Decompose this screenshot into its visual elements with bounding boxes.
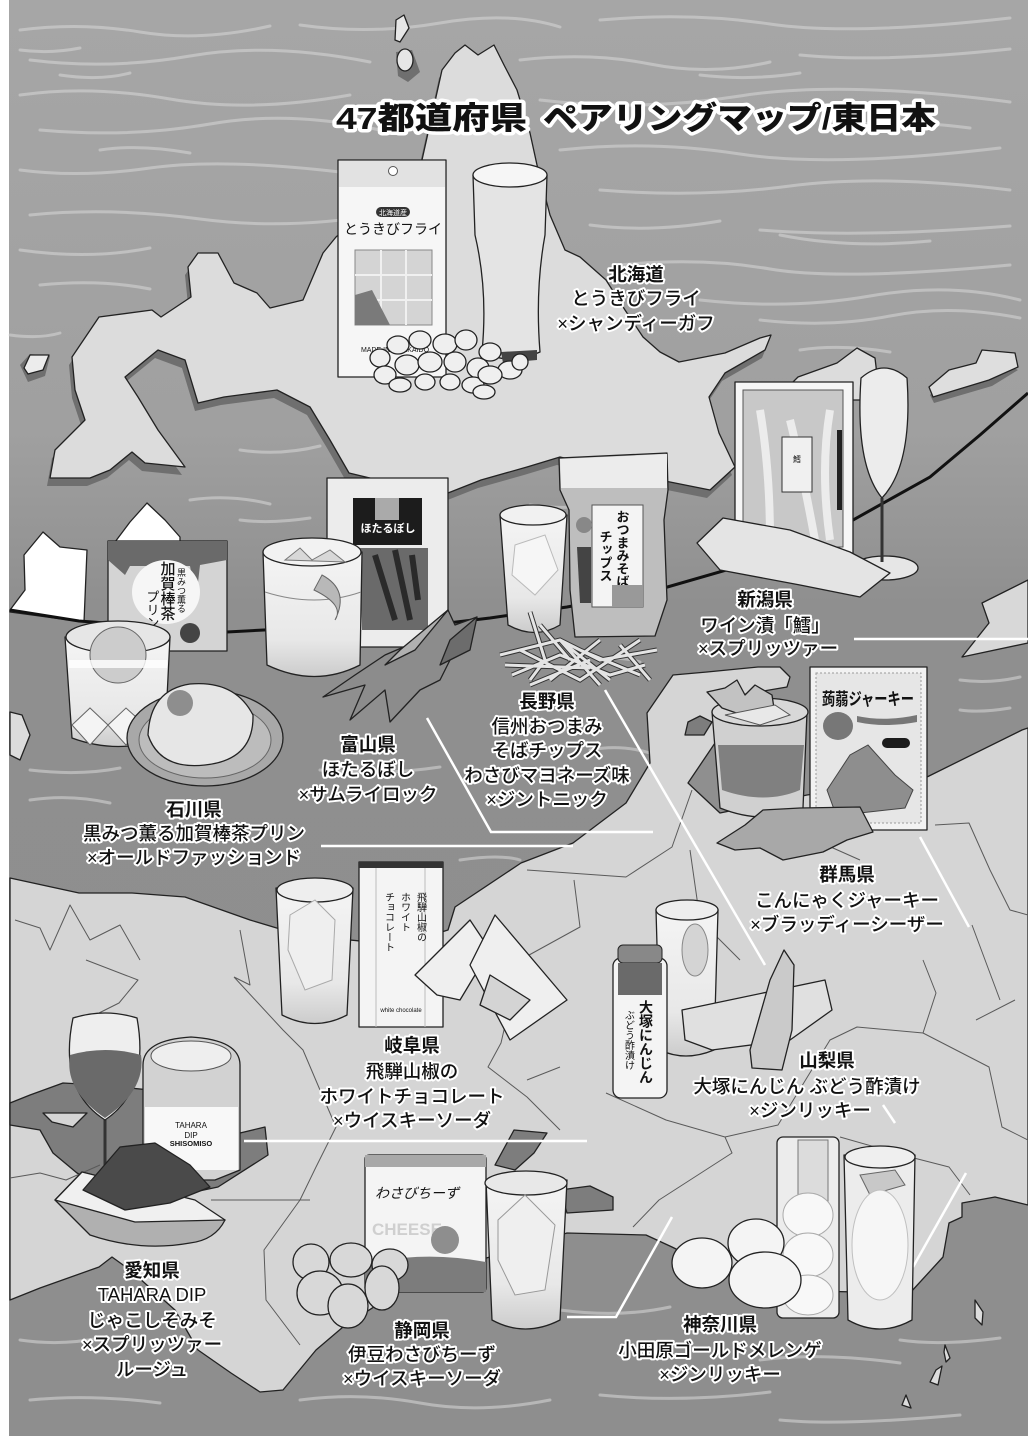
panel: 石川県 [65, 541, 305, 868]
label: 石川県: 黒みつ薫る加賀棒茶プリン [83, 823, 305, 844]
product box: 加賀棒茶プリン: 加賀棒茶 [158, 561, 176, 621]
label: 群馬県: ×ブラッディーシーザー [750, 914, 944, 935]
label: 愛知県: ×スプリッツァー [82, 1334, 222, 1355]
product bag: ほたるぼし [327, 478, 448, 647]
product package: ワイン漬 鱈 [735, 382, 853, 558]
panel: 北海道 [338, 160, 715, 399]
label: 神奈川県: 小田原ゴールドメレンゲ [618, 1340, 822, 1361]
gin rickey glass [844, 1146, 915, 1329]
soba chips pile [500, 612, 657, 685]
product bag: 伊豆わさびちーず [365, 1155, 486, 1292]
label: 神奈川県: ×ジンリッキー [659, 1364, 781, 1385]
carrots [682, 950, 832, 1070]
label: 愛知県: 愛知県 [124, 1260, 180, 1281]
title [336, 101, 936, 136]
label: 神奈川県: 神奈川県 [683, 1314, 757, 1335]
product box: ホワイトチョコレート: white chocolate [379, 1008, 422, 1014]
label: 岐阜県: ホワイトチョコレート [319, 1086, 505, 1107]
product jar: TAHARA DIP [143, 1037, 240, 1180]
product box: 加賀棒茶プリン [108, 541, 227, 651]
label: 新潟県: ワイン漬「鱈」 [700, 615, 830, 636]
pudding on plate [127, 684, 283, 786]
champagne glass: スプリッツァー [852, 368, 918, 580]
panel: 長野県 [464, 453, 668, 810]
panel: 静岡県 [293, 1155, 567, 1389]
product box: ホワイトチョコレート [359, 862, 443, 1027]
preserved cod fillet [697, 518, 890, 597]
label: 静岡県: ×ウイスキーソーダ [343, 1368, 501, 1389]
product bag: 伊豆わさびちーず: わさびちーず [375, 1185, 461, 1201]
label: 富山県: ×サムライロック [298, 784, 438, 805]
white chocolate pieces [415, 915, 567, 1040]
product jar: 大塚にんじん: ぶどう酢漬け [622, 1010, 634, 1070]
gin rickey glass [656, 900, 718, 1056]
label: 長野県: わさびマヨネーズ味 [464, 765, 630, 786]
product jar: TAHARA DIP: SHISOMISO [170, 1139, 212, 1148]
label: 岐阜県: 岐阜県 [384, 1035, 440, 1056]
bloody caesar glass [707, 680, 808, 817]
panel: 群馬県 [707, 667, 944, 935]
product package: こんにゃくジャーキー [810, 667, 927, 830]
label: 山梨県 [693, 1050, 921, 1121]
map: prefecture borders [10, 790, 1028, 1345]
panel: 富山県 [263, 478, 477, 805]
label: 長野県 [464, 691, 630, 810]
label: 北海道: とうきびフライ [571, 288, 701, 309]
corn snack pile [370, 330, 528, 399]
product bag: おつまみそばチップス [559, 453, 668, 637]
panel: 山梨県 [613, 900, 921, 1121]
product bag: ほたるぼし: ほたるぼし [360, 522, 416, 535]
product box: ホワイトチョコレート: ホワイト [398, 892, 410, 932]
product bag: とうきびフライ: MADE IN HOKKAIDO [361, 347, 430, 354]
leader lines [244, 639, 1028, 1317]
title: 47都道府県 [336, 101, 527, 136]
label: 愛知県: TAHARA DIP [98, 1284, 206, 1305]
konjac jerky [717, 807, 873, 860]
lemons [672, 1219, 801, 1308]
map: white land top left [10, 503, 180, 760]
label: 愛知県: ルージュ [116, 1359, 188, 1380]
map: inland bays [10, 716, 712, 1213]
rose wine glass [69, 1013, 142, 1165]
label: 山梨県: 山梨県 [799, 1050, 855, 1071]
label: 富山県 [298, 734, 438, 805]
label: 石川県 [83, 799, 305, 868]
product box: 加賀棒茶プリン: プリン [144, 590, 160, 629]
whisky soda glass [276, 878, 353, 1024]
product box: ホワイトチョコレート: 飛騨山椒の [414, 892, 426, 942]
label: 石川県: ×オールドファッションド [87, 847, 301, 868]
beer glass: シャンディーガフ [473, 163, 547, 363]
product bag: おつまみそばチップス: チップス [598, 530, 612, 582]
product jar: ゴールドメレンゲ [777, 1137, 839, 1318]
label: 神奈川県 [618, 1314, 822, 1385]
wasabi cheese balls [293, 1243, 408, 1328]
map: eastern island [962, 580, 1028, 657]
dip on shell [55, 1143, 225, 1246]
whisky soda glass [485, 1171, 567, 1329]
product package: こんにゃくジャーキー: 蒟蒻ジャーキー [822, 690, 914, 709]
title: ペアリングマップ/東日本 [543, 101, 936, 136]
product package: ワイン漬 鱈: 鱈 [793, 454, 801, 464]
label: 北海道: ×シャンディーガフ [557, 313, 715, 334]
map: small islands north [20, 15, 1018, 403]
map: northern land mass shadow [47, 53, 768, 501]
label: 山梨県: 大塚にんじん ぶどう酢漬け [693, 1076, 921, 1097]
label: 富山県: ほたるぼし [322, 759, 414, 780]
label: 群馬県: 群馬県 [819, 864, 875, 885]
firefly squid [323, 610, 477, 722]
map: southern land mass [10, 667, 1028, 1392]
product box: ホワイトチョコレート: チョコレート [382, 892, 394, 952]
label: 静岡県 [343, 1320, 501, 1389]
product jar: 大塚にんじん [613, 945, 667, 1098]
label: 新潟県 [698, 589, 838, 659]
panel: 神奈川県 [618, 1137, 915, 1385]
product bag: 伊豆わさびちーず: CHEESE [372, 1220, 442, 1239]
label: 北海道: 北海道 [608, 264, 664, 285]
label: 静岡県: 伊豆わさびちーず [348, 1344, 496, 1365]
product bag: とうきびフライ [338, 160, 446, 377]
glass: ジントニック [500, 505, 567, 632]
panel: 岐阜県 [276, 862, 567, 1131]
product bag: おつまみそばチップス: おつまみそば [614, 510, 630, 588]
label: 岐阜県: 飛騨山椒の [366, 1061, 458, 1082]
product bag: とうきびフライ: 北海道産 [379, 208, 407, 217]
label: 富山県: 富山県 [340, 734, 396, 755]
glass: サムライロック [263, 538, 362, 676]
label: 新潟県: ×スプリッツァー [698, 638, 838, 659]
panel: 愛知県 [55, 1013, 240, 1380]
panel: 新潟県 [697, 368, 918, 659]
label: 新潟県: 新潟県 [737, 589, 793, 610]
map: northern land mass [50, 45, 771, 493]
product jar: 大塚にんじん: 大塚にんじん [638, 999, 654, 1084]
product bag: とうきびフライ: とうきびフライ [344, 221, 442, 237]
label: 静岡県: 静岡県 [394, 1320, 450, 1341]
label: 北海道 [557, 264, 715, 334]
label: 岐阜県: ×ウイスキーソーダ [333, 1110, 491, 1131]
old fashioned glass [65, 621, 170, 746]
map: route line [10, 393, 1028, 632]
label: 長野県: ×ジントニック [486, 789, 608, 810]
label: 長野県: そばチップス [491, 740, 603, 761]
label: 長野県: 長野県 [519, 691, 575, 712]
label: 愛知県: じゃこしそみそ [87, 1310, 217, 1331]
label: 愛知県 [82, 1260, 222, 1380]
label: 群馬県: こんにゃくジャーキー [755, 890, 939, 911]
label: 群馬県 [750, 864, 944, 935]
label: 岐阜県 [319, 1035, 505, 1131]
product jar: TAHARA DIP: TAHARA [175, 1121, 208, 1130]
label: 長野県: 信州おつまみ [491, 716, 603, 737]
label: 山梨県: ×ジンリッキー [749, 1100, 871, 1121]
small islands south [902, 1300, 983, 1408]
product jar: TAHARA DIP: DIP [184, 1131, 198, 1140]
label: 石川県: 石川県 [166, 799, 222, 820]
product box: 加賀棒茶プリン: 黒みつ薫る [176, 568, 186, 613]
